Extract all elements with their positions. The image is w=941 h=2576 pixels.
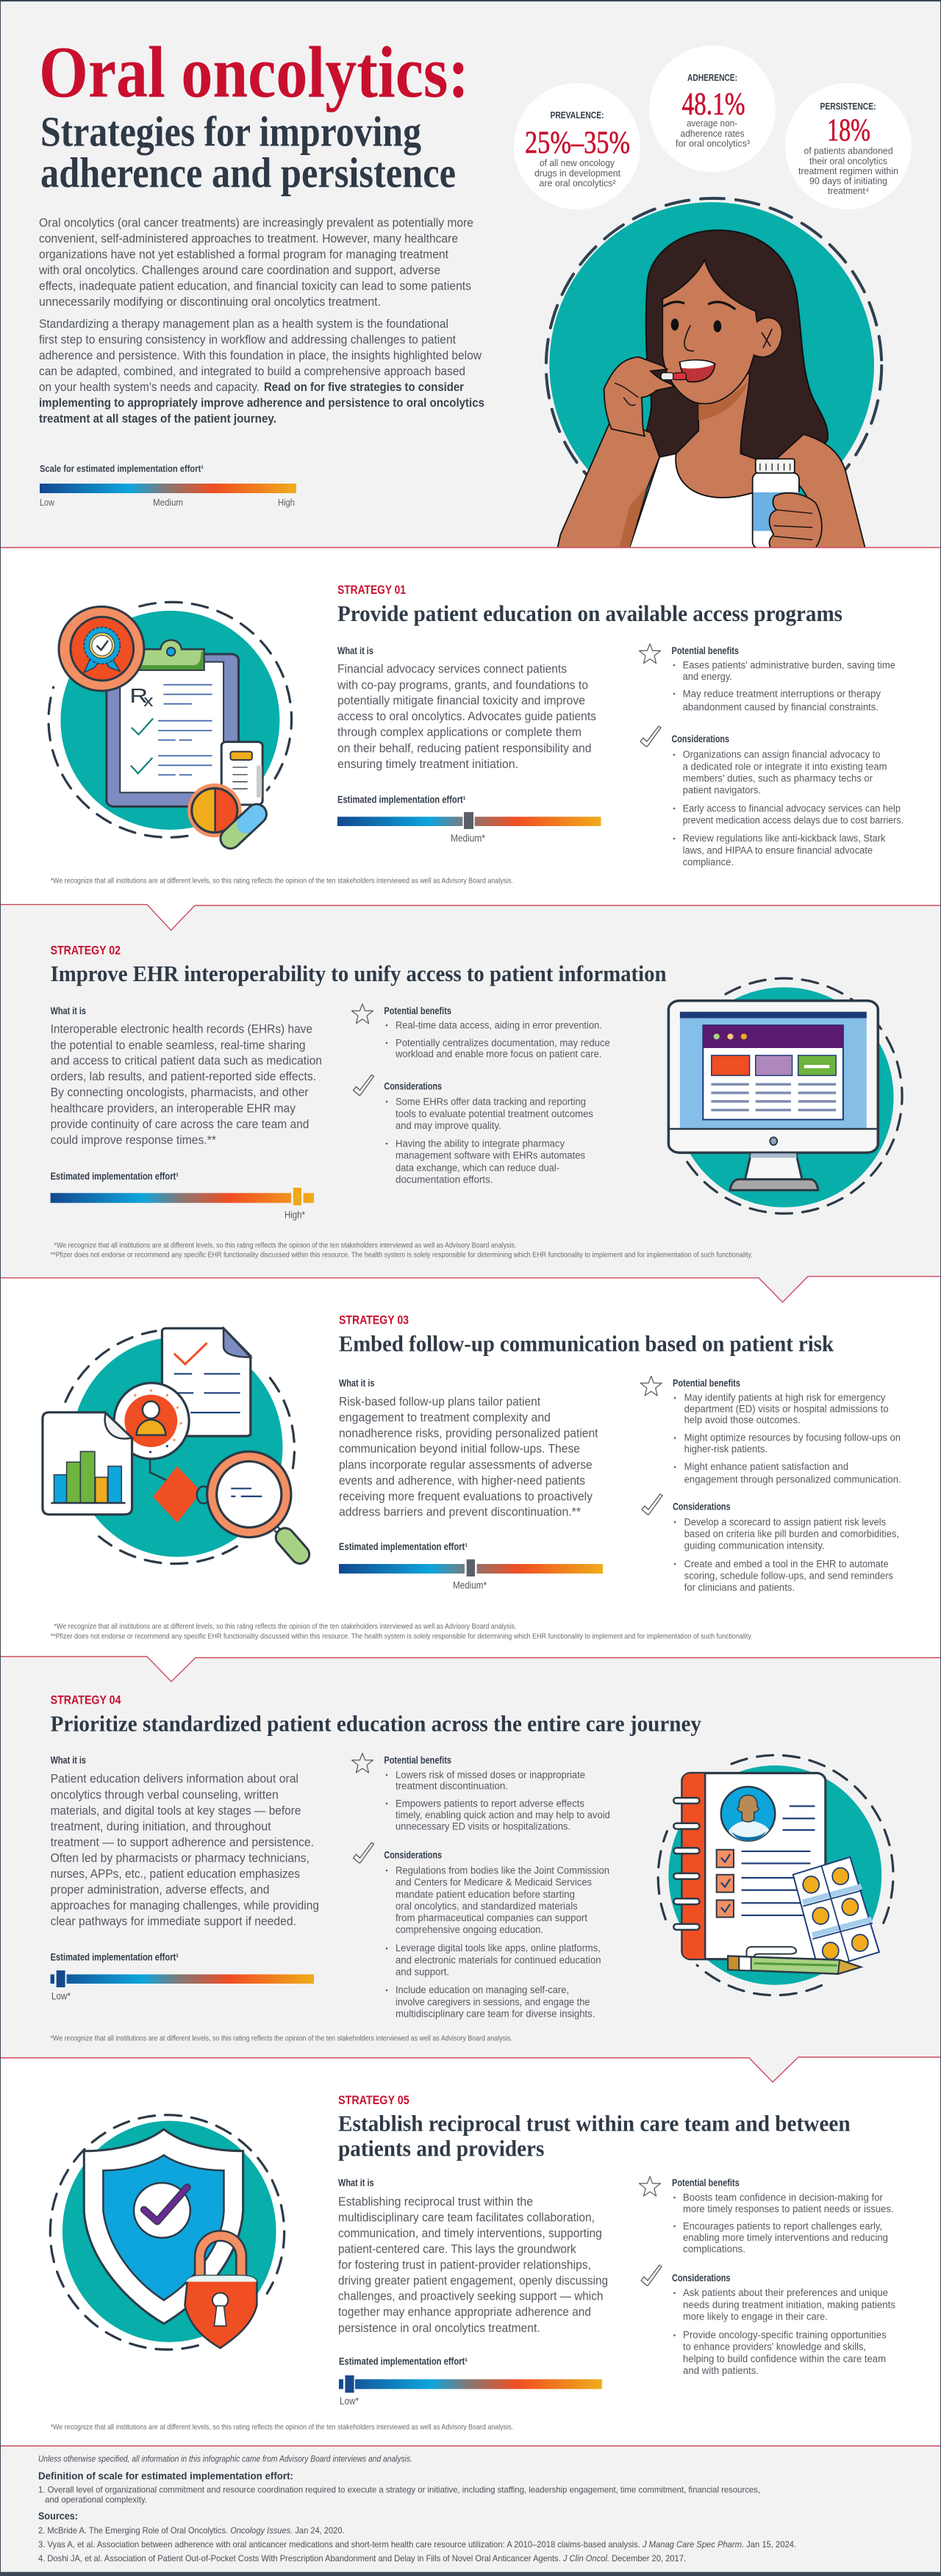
what it is text block: communication beyond initial follow-ups. These bbox=[339, 1443, 580, 1456]
potential benefits list: complications. bbox=[683, 2243, 745, 2255]
footnotes bbox=[51, 1622, 753, 1640]
what it is text block bbox=[339, 1378, 598, 1519]
considerations list: involve caregivers in sessions, and engage the bbox=[396, 1997, 590, 2008]
what it is text block: receiving more frequent evaluations to proactively bbox=[339, 1490, 593, 1504]
potential benefits list: Empowers patients to report adverse effects bbox=[396, 1798, 584, 1809]
strategy label: STRATEGY 02 bbox=[51, 943, 121, 957]
considerations list: Develop a scorecard to assign patient risk levels bbox=[684, 1516, 886, 1527]
effort gauge: high: High* bbox=[285, 1210, 306, 1221]
considerations list: laws, and HIPAA to ensure financial advocate bbox=[683, 845, 873, 856]
what it is text block: approaches for managing challenges, while providing bbox=[51, 1899, 319, 1912]
callout: prevalence: 25%–35% bbox=[525, 126, 630, 160]
potential benefits list bbox=[384, 1005, 610, 1059]
icon: star bbox=[640, 2177, 660, 2196]
what it is text block: Patient education delivers information about oral bbox=[51, 1773, 298, 1786]
panel: strategy 05 bbox=[50, 2093, 895, 2431]
considerations list: documentation efforts. bbox=[396, 1174, 493, 1185]
heading: Establish reciprocal trust within care team and between bbox=[338, 2110, 851, 2136]
callout: prevalence: drugs in development bbox=[534, 168, 620, 179]
potential benefits list: Boosts team confidence in decision-making for bbox=[683, 2192, 883, 2203]
considerations list: needs during treatment initiation, making patients bbox=[683, 2300, 895, 2311]
what it is text block: nonadherence risks, providing personalized patient bbox=[339, 1427, 598, 1440]
what it is text block: persistence in oral oncolytics treatment. bbox=[338, 2322, 540, 2335]
potential benefits list bbox=[673, 1378, 901, 1485]
what it is text block: multidisciplinary care team facilitates collaboration, bbox=[338, 2211, 595, 2225]
footnote: *We recognize that all institutions are at different levels, so this rating reflects the opinion of the ten stakeholders interviewed as well as Advisory Board analysis. bbox=[51, 877, 513, 886]
callout: prevalence: of all new oncology bbox=[540, 157, 615, 168]
what it is text block: materials, and digital tools at key stages — before bbox=[51, 1804, 301, 1818]
effort gauge: low: Estimated implementation effort¹ bbox=[339, 2356, 468, 2367]
callout: persistence: of patients abandoned bbox=[804, 146, 892, 157]
footer: definitions and sources: 4. Doshi JA, et al. Association of Patient Out-of-Pocket Costs With Prescription Abandonment and Delay in Fills of Novel Oral Anticancer Agents. J Clin Oncol. December 20, 2017. bbox=[38, 2553, 686, 2564]
potential benefits list: Eases patients' administrative burden, saving time bbox=[683, 659, 895, 670]
considerations list: to enhance providers' knowledge and skills, bbox=[683, 2342, 866, 2353]
panel: strategy 03 background bbox=[0, 1277, 941, 1682]
callout: prevalence: PREVALENCE: bbox=[550, 110, 604, 121]
subtitle: adherence and persistence bbox=[40, 148, 456, 197]
panel: strategy 01 bbox=[49, 583, 904, 886]
potential benefits list: unnecessary ED visits or hospitalizations. bbox=[396, 1820, 570, 1831]
intro text block: Standardizing a therapy management plan as a health system is the foundational bbox=[39, 317, 448, 331]
potential benefits list: workload and enable more focus on patient care. bbox=[395, 1048, 601, 1059]
what it is text block: could improve response times.** bbox=[51, 1134, 217, 1147]
illustration: prescription clipboard with badge and pills bbox=[49, 602, 292, 839]
potential benefits list: treatment discontinuation. bbox=[396, 1781, 508, 1792]
callout: persistence: 90 days of initiating bbox=[809, 176, 887, 187]
footnotes: **Pfizer does not endorse or recommend any specific EHR functionality discussed within this resource. The health system is solely responsible for determining which EHR functionality to implement and for implementation of such functionality. bbox=[51, 1251, 753, 1260]
potential benefits list: Potential benefits bbox=[672, 2178, 740, 2189]
considerations list: management software with EHRs automates bbox=[396, 1150, 585, 1161]
potential benefits list: more timely responses to patient needs or issues. bbox=[683, 2203, 894, 2214]
what it is text block: on their behalf, reducing patient responsibility and bbox=[337, 742, 591, 755]
intro text block: effects, inadequate patient education, and financial toxicity can lead to some patients bbox=[39, 280, 471, 293]
heading: Provide patient education on available access programs bbox=[337, 600, 842, 626]
panel: strategy 02 bbox=[51, 943, 902, 1260]
effort scale legend: Medium bbox=[153, 497, 183, 508]
callout: adherence: ADHERENCE: bbox=[687, 73, 737, 83]
what it is text block: What it is bbox=[51, 1005, 86, 1016]
heading: patients and providers bbox=[338, 2136, 544, 2161]
potential benefits list: abandonment caused by financial constraints. bbox=[683, 702, 879, 713]
considerations list bbox=[672, 2272, 895, 2376]
considerations list: more likely to engage in their care. bbox=[683, 2311, 828, 2322]
intro text block: adherence and persistence. With this foundation in place, the insights highlighted below bbox=[39, 349, 482, 362]
considerations list: compliance. bbox=[683, 857, 734, 868]
icon: check bbox=[640, 726, 661, 747]
potential benefits list: department (ED) visits or hospital admissions to bbox=[684, 1403, 889, 1414]
potential benefits list: May reduce treatment interruptions or therapy bbox=[683, 688, 881, 699]
what it is text block: engagement to treatment complexity and bbox=[339, 1411, 551, 1424]
what it is text block: By connecting oncologists, pharmacists, and other bbox=[51, 1086, 309, 1099]
heading bbox=[338, 2110, 851, 2161]
effort gauge: low: Low* bbox=[51, 1990, 71, 2001]
illustration: woman taking an oral pill bbox=[546, 198, 881, 548]
potential benefits list: Encourages patients to report challenges early, bbox=[683, 2221, 882, 2231]
what it is text block: with co-pay programs, grants, and foundations to bbox=[337, 678, 588, 692]
potential benefits list: and energy. bbox=[683, 671, 732, 682]
considerations list: for clinicians and patients. bbox=[684, 1582, 795, 1593]
what it is text block: What it is bbox=[337, 645, 373, 656]
icon: star bbox=[351, 1004, 373, 1023]
considerations list: helping to build confidence within the care team bbox=[683, 2353, 886, 2364]
intro text block: convenient, self-administered approaches to treatment. However, many healthcare bbox=[39, 232, 458, 245]
callout: adherence: adherence rates bbox=[681, 128, 745, 139]
illustration: shield with check and padlock bbox=[50, 2115, 285, 2350]
illustration: documents, chart and magnifying glass bbox=[43, 1328, 300, 1564]
panel: strategy 01 background bbox=[0, 548, 941, 930]
what it is text block: patient-centered care. This lays the groundwork bbox=[338, 2242, 576, 2256]
considerations list: and electronic materials for continued education bbox=[396, 1954, 601, 1965]
what it is text block: Establishing reciprocal trust within the bbox=[338, 2195, 533, 2209]
considerations list: Considerations bbox=[673, 1501, 731, 1512]
callout: persistence bbox=[785, 83, 912, 209]
footer: definitions and sources: 1. Overall level of organizational commitment and resource coordination required to execute a strategy or initiative, including staffing, leadership engagement, time commitment, financial resources, bbox=[38, 2484, 760, 2494]
effort scale legend: Low bbox=[40, 497, 55, 508]
considerations list: and with patients. bbox=[683, 2365, 759, 2376]
title bbox=[39, 31, 469, 197]
considerations list: Some EHRs offer data tracking and reporting bbox=[396, 1096, 586, 1107]
potential benefits list: Potential benefits bbox=[672, 645, 739, 656]
what it is text block: What it is bbox=[338, 2178, 374, 2189]
icon: check bbox=[641, 2265, 662, 2286]
what it is text block: together may enhance appropriate adherence and bbox=[338, 2306, 591, 2319]
callout: prevalence: are oral oncolytics² bbox=[540, 178, 616, 189]
potential benefits list: Might optimize resources by focusing follow-ups on bbox=[684, 1432, 901, 1443]
effort gauge: low: Estimated implementation effort¹ bbox=[51, 1952, 179, 1962]
icon: star bbox=[351, 1754, 373, 1773]
heading: Improve EHR interoperability to unify access to patient information bbox=[51, 961, 667, 986]
icon: check bbox=[642, 1494, 662, 1515]
effort gauge: low bbox=[51, 1952, 314, 2001]
footnotes: *We recognize that all institutions are at different levels, so this rating reflects the opinion of the ten stakeholders interviewed as well as Advisory Board analysis. bbox=[54, 1622, 516, 1631]
intro text block: can be adapted, combined, and integrated to build a comprehensive approach based bbox=[39, 365, 465, 378]
considerations list: Include education on managing self-care, bbox=[396, 1984, 569, 1995]
illustration: patient notebook, blister pack and pencil bbox=[658, 1755, 893, 1995]
footer: definitions and sources: and operational complexity. bbox=[45, 2494, 147, 2505]
what it is text block: oncolytics through verbal counseling, written bbox=[51, 1789, 279, 1802]
considerations list: comprehensive ongoing education. bbox=[396, 1924, 543, 1935]
considerations list: and support. bbox=[396, 1967, 449, 1977]
effort gauge: low: Low* bbox=[340, 2396, 359, 2406]
panel: strategy 05 background bbox=[0, 2057, 941, 2446]
considerations list: and Centers for Medicare & Medicaid Services bbox=[396, 1877, 592, 1888]
considerations list: Having the ability to integrate pharmacy bbox=[396, 1138, 565, 1149]
what it is text block bbox=[337, 645, 596, 771]
panel: strategy 03 bbox=[43, 1313, 901, 1640]
intro text block: on your health system's needs and capacity. bbox=[39, 381, 260, 394]
heading: Embed follow-up communication based on patient risk bbox=[339, 1330, 834, 1356]
what it is text block: events and adherence, with higher-need patients bbox=[339, 1474, 585, 1488]
considerations list: from pharmaceutical companies can support bbox=[396, 1912, 587, 1923]
considerations list: Review regulations like anti-kickback laws, Stark bbox=[683, 833, 886, 844]
callout: prevalence bbox=[514, 83, 640, 209]
main heading: Oral oncolytics: bbox=[39, 31, 469, 113]
considerations list: Considerations bbox=[384, 1850, 442, 1861]
callout: adherence: for oral oncolytics³ bbox=[676, 138, 751, 148]
icon: star bbox=[640, 644, 660, 663]
what it is text block: Financial advocacy services connect patients bbox=[337, 663, 567, 676]
considerations list: Organizations can assign financial advocacy to bbox=[683, 749, 881, 760]
potential benefits list: Potentially centralizes documentation, may reduce bbox=[396, 1037, 610, 1048]
heading: Prioritize standardized patient education across the entire care journey bbox=[51, 1710, 701, 1736]
considerations list bbox=[384, 1850, 609, 2020]
strategy label: STRATEGY 01 bbox=[337, 583, 406, 597]
what it is text block bbox=[51, 1005, 322, 1147]
considerations list: Considerations bbox=[384, 1081, 442, 1092]
effort scale legend: Scale for estimated implementation effort¹ bbox=[40, 464, 204, 474]
what it is text block: orders, lab results, and patient-reported side effects. bbox=[51, 1070, 316, 1083]
considerations list: tools to evaluate potential treatment outcomes bbox=[396, 1108, 593, 1119]
callout: adherence: average non- bbox=[687, 118, 737, 129]
intro text block: Read on for five strategies to consider bbox=[264, 381, 465, 394]
effort gauge: high: Estimated implementation effort¹ bbox=[51, 1171, 179, 1182]
considerations list bbox=[673, 1501, 899, 1593]
potential benefits list: Lowers risk of missed doses or inappropriate bbox=[396, 1769, 585, 1780]
considerations list: Create and embed a tool in the EHR to automate bbox=[684, 1558, 889, 1569]
effort gauge: medium: Estimated implementation effort¹ bbox=[339, 1541, 468, 1552]
callout: adherence bbox=[649, 46, 776, 172]
subtitle bbox=[40, 107, 456, 197]
potential benefits list bbox=[672, 645, 895, 713]
considerations list: Ask patients about their preferences and unique bbox=[683, 2287, 888, 2298]
what it is text block: potentially mitigate financial toxicity and improve bbox=[337, 695, 585, 708]
what it is text block: proper administration, adverse effects, and bbox=[51, 1883, 269, 1896]
what it is text block: Risk-based follow-up plans tailor patient bbox=[339, 1395, 540, 1408]
footer: definitions and sources: Unless otherwise specified, all information in this infographic came from Advisory Board interviews and analysis. bbox=[38, 2453, 412, 2464]
what it is text block: challenges, and proactively seeking support — which bbox=[338, 2290, 603, 2303]
considerations list: Considerations bbox=[672, 2272, 731, 2283]
icon: check bbox=[353, 1843, 373, 1863]
potential benefits list: Potential benefits bbox=[384, 1005, 451, 1016]
effort gauge: low bbox=[339, 2356, 602, 2406]
what it is text block: Often led by pharmacists or pharmacy technicians, bbox=[51, 1852, 310, 1865]
footer: definitions and sources bbox=[38, 2453, 796, 2564]
strategy label: STRATEGY 04 bbox=[51, 1693, 121, 1707]
considerations list bbox=[672, 733, 904, 868]
icon: check bbox=[353, 1074, 373, 1095]
potential benefits list: help avoid those outcomes. bbox=[684, 1415, 801, 1426]
callout: adherence: 48.1% bbox=[682, 87, 745, 122]
intro text block: unnecessarily modifying or discontinuing oral oncolytics treatment. bbox=[39, 295, 381, 309]
what it is text block: driving greater patient engagement, openly discussing bbox=[338, 2274, 608, 2287]
panel: strategy 04 bbox=[51, 1693, 893, 2042]
footnotes: **Pfizer does not endorse or recommend any specific EHR functionality discussed within this resource. The health system is solely responsible for determining which EHR functionality to implement and for implementation of such functionality. bbox=[51, 1632, 753, 1640]
what it is text block: Interoperable electronic health records (EHRs) have bbox=[51, 1023, 312, 1036]
effort scale legend bbox=[40, 464, 296, 508]
what it is text block: plans incorporate regular assessments of adverse bbox=[339, 1458, 593, 1471]
what it is text block bbox=[51, 1755, 319, 1928]
potential benefits list: Potential benefits bbox=[384, 1755, 451, 1766]
considerations list: members' duties, such as pharmacy techs or bbox=[683, 772, 873, 783]
considerations list: Early access to financial advocacy services can help bbox=[683, 803, 901, 814]
potential benefits list: Real-time data access, aiding in error prevention. bbox=[396, 1019, 602, 1030]
considerations list: multidisciplinary care team for diverse insights. bbox=[396, 2009, 595, 2020]
considerations list: mandate patient education before starting bbox=[396, 1889, 575, 1900]
strategy label: STRATEGY 03 bbox=[339, 1313, 409, 1327]
footnotes bbox=[51, 1241, 753, 1260]
footer: definitions and sources: 2. McBride A. The Emerging Role of Oral Oncolytics. Oncology Issues. Jan 24, 2020. bbox=[38, 2525, 345, 2536]
effort gauge: medium: Medium* bbox=[451, 833, 486, 844]
what it is text block: treatment — to support adherence and persistence. bbox=[51, 1836, 314, 1849]
what it is text block: communication, and timely interventions, supporting bbox=[338, 2227, 602, 2240]
what it is text block: healthcare providers, an interoperable EHR may bbox=[51, 1102, 296, 1115]
what it is text block: and access to critical patient data such as medication bbox=[51, 1055, 322, 1068]
considerations list: Leverage digital tools like apps, online platforms, bbox=[396, 1942, 601, 1953]
footer: definitions and sources: Definition of scale for estimated implementation effort: bbox=[38, 2470, 293, 2482]
intro text block bbox=[38, 217, 484, 426]
potential benefits list: enabling more timely interventions and reducing bbox=[683, 2232, 888, 2243]
callout: persistence: PERSISTENCE: bbox=[820, 101, 876, 112]
effort gauge: medium: Medium* bbox=[453, 1580, 487, 1591]
what it is text block: the potential to enable seamless, real-time sharing bbox=[51, 1038, 305, 1052]
intro text block: implementing to appropriately improve adherence and persistence to oral oncolytics bbox=[39, 397, 484, 410]
footer: definitions and sources: Sources: bbox=[38, 2510, 78, 2522]
considerations list: data exchange, which can reduce dual- bbox=[396, 1162, 559, 1173]
what it is text block: What it is bbox=[339, 1378, 374, 1389]
intro text block: organizations have not yet established a formal program for managing treatment bbox=[39, 248, 448, 262]
subtitle: Strategies for improving bbox=[40, 107, 421, 156]
icon: star bbox=[640, 1376, 662, 1396]
considerations list: Provide oncology-specific training opportunities bbox=[683, 2330, 887, 2341]
what it is text block bbox=[338, 2178, 608, 2335]
considerations list: guiding communication intensity. bbox=[684, 1540, 825, 1551]
potential benefits list bbox=[672, 2178, 894, 2255]
callout: persistence: treatment regimen within bbox=[798, 165, 898, 176]
considerations list: scoring, schedule follow-ups, and send reminders bbox=[684, 1571, 893, 1582]
what it is text block: address barriers and prevent discontinuation.** bbox=[339, 1506, 582, 1519]
callout: persistence: 18% bbox=[827, 113, 870, 148]
intro text block: with oral oncolytics. Challenges around care coordination and support, adverse bbox=[38, 264, 440, 277]
strategy label: STRATEGY 05 bbox=[338, 2093, 409, 2107]
what it is text block: What it is bbox=[51, 1755, 86, 1766]
potential benefits list: engagement through personalized communication. bbox=[684, 1474, 901, 1485]
footnote: *We recognize that all institutions are at different levels, so this rating reflects the opinion of the ten stakeholders interviewed as well as Advisory Board analysis. bbox=[51, 2422, 513, 2431]
what it is text block: access to oral oncolytics. Advocates guide patients bbox=[337, 710, 596, 723]
considerations list: a dedicated role or integrate it into existing team bbox=[683, 761, 887, 772]
effort gauge: high bbox=[51, 1171, 314, 1221]
considerations list bbox=[384, 1081, 593, 1185]
considerations list: patient navigators. bbox=[683, 784, 761, 795]
intro text block: first step to ensuring consistency in workflow and addressing challenges to patient bbox=[39, 334, 456, 347]
intro text block: treatment at all stages of the patient journey. bbox=[39, 412, 276, 426]
potential benefits list: Potential benefits bbox=[673, 1378, 740, 1389]
effort gauge: medium bbox=[337, 794, 601, 844]
what it is text block: ensuring timely treatment initiation. bbox=[337, 758, 518, 771]
footnote: *We recognize that all institutions are at different levels, so this rating reflects the opinion of the ten stakeholders interviewed as well as Advisory Board analysis. bbox=[51, 2034, 512, 2042]
potential benefits list: timely, enabling quick action and may help to avoid bbox=[396, 1809, 610, 1820]
potential benefits list: higher-risk patients. bbox=[684, 1443, 768, 1454]
effort gauge: medium bbox=[339, 1541, 603, 1591]
potential benefits list: Might enhance patient satisfaction and bbox=[684, 1461, 848, 1472]
what it is text block: through complex applications or complete them bbox=[337, 726, 582, 739]
what it is text block: provide continuity of care across the care team and bbox=[51, 1118, 309, 1131]
considerations list: prevent medication access delays due to cost barriers. bbox=[683, 815, 904, 826]
effort scale legend: High bbox=[278, 497, 295, 508]
considerations list: Regulations from bodies like the Joint Commission bbox=[396, 1865, 609, 1876]
what it is text block: nurses, APPs, etc., patient education emphasizes bbox=[51, 1868, 300, 1881]
footnotes: *We recognize that all institutions are at different levels, so this rating reflects the opinion of the ten stakeholders interviewed as well as Advisory Board analysis. bbox=[54, 1241, 516, 1249]
potential benefits list bbox=[384, 1755, 610, 1831]
considerations list: Considerations bbox=[672, 733, 729, 745]
illustration: computer monitor with EHR screen bbox=[668, 978, 902, 1213]
illustration: prescription clipboard with badge and pills: R bbox=[129, 684, 148, 707]
footer: definitions and sources: 3. Vyas A, et al. Association between adherence with oral anticancer medications and short-term health care resource utilization: A 2010–2018 claims-based analysis. J Manag Care Spec Pharm. Jan 15, 2024. bbox=[38, 2539, 796, 2550]
what it is text block: for fostering trust in patient-provider relationships, bbox=[338, 2259, 591, 2272]
potential benefits list: May identify patients at high risk for emergency bbox=[684, 1392, 886, 1403]
effort gauge: medium: Estimated implementation effort¹ bbox=[337, 794, 466, 806]
illustration: prescription clipboard with badge and pills: x bbox=[143, 692, 154, 710]
considerations list: oral oncolytics, and standardized materials bbox=[396, 1901, 578, 1912]
callout: persistence: treatment⁴ bbox=[828, 185, 869, 196]
what it is text block: clear pathways for immediate support if needed. bbox=[51, 1915, 296, 1928]
considerations list: and may improve quality. bbox=[396, 1120, 501, 1131]
callout: persistence: their oral oncolytics bbox=[809, 155, 887, 166]
what it is text block: treatment, during initiation, and throughout bbox=[51, 1820, 271, 1833]
considerations list: based on criteria like pill burden and comorbidities, bbox=[684, 1529, 899, 1540]
intro text block: Oral oncolytics (oral cancer treatments) are increasingly prevalent as potentially more bbox=[39, 217, 473, 230]
